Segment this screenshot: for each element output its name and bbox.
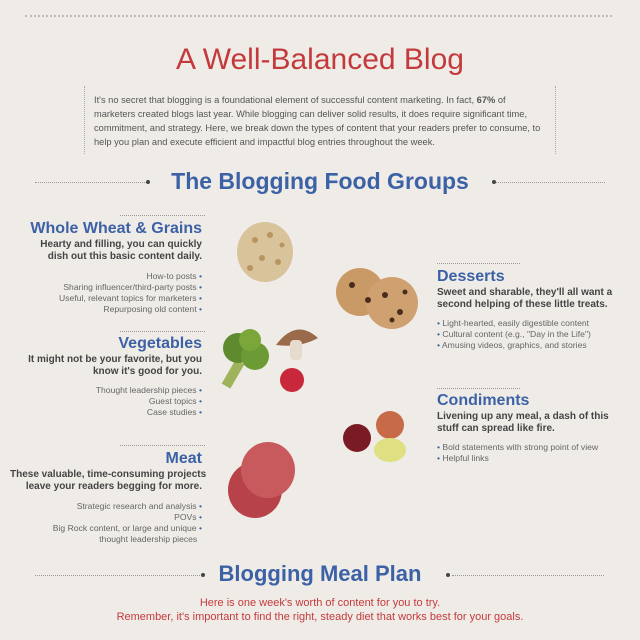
panel: vegetables: Guest topics — [149, 396, 197, 406]
panel: whole wheat: How-to posts — [146, 271, 197, 281]
icon: broccoli — [222, 329, 269, 389]
panel: whole wheat: Useful, relevant topics for marketers — [59, 293, 197, 303]
red subtitle — [117, 597, 523, 623]
panel: vegetables — [28, 331, 205, 417]
panel: condiments: Livening up any meal, a dash of this — [437, 411, 609, 422]
red subtitle: Here is one week's worth of content for you to try. — [200, 597, 440, 609]
panel: vegetables: Vegetables — [118, 335, 202, 352]
panel: whole wheat: Whole Wheat & Grains — [30, 220, 202, 237]
intro paragraph: It's no secret that blogging is a foundational element of successful content marketing. In fact, 67% of marketers created blogs last year. While blogging can deliver solid results, it does require significant time, commitment, and strategy. Here, we break down the types of content that your readers prefer to consume, to help you plan and execute efficient and impactful blog entries throughout the week. — [94, 95, 540, 147]
icon: condiments — [343, 411, 406, 462]
panel: desserts: second helping of these little treats. — [437, 299, 608, 310]
panel: desserts: Amusing videos, graphics, and stories — [442, 340, 587, 350]
panel: whole wheat: Hearty and filling, you can quickly — [40, 239, 202, 250]
panel: whole wheat — [30, 215, 205, 314]
icon: salami — [228, 442, 295, 518]
panel: meat: These valuable, time-consuming projects — [10, 469, 206, 480]
panel: meat: Strategic research and analysis — [77, 501, 197, 511]
panel: vegetables: Thought leadership pieces — [96, 385, 197, 395]
panel: meat: leave your readers begging for more. — [26, 481, 202, 492]
panel: meat: POVs — [174, 512, 197, 522]
heading: meal plan: Blogging Meal Plan — [219, 561, 421, 586]
panel: meat — [10, 445, 206, 544]
panel: desserts — [437, 263, 612, 350]
heading: food groups: The Blogging Food Groups — [171, 168, 469, 194]
panel: meat: Meat — [166, 450, 202, 467]
panel: condiments: Bold statements with strong point of view — [442, 442, 598, 452]
title: A Well-Balanced Blog — [176, 43, 464, 76]
icon: cookies — [336, 268, 418, 329]
panel: desserts: Desserts — [437, 268, 505, 285]
panel: condiments: Helpful links — [442, 453, 489, 463]
panel: vegetables: Case studies — [147, 407, 197, 417]
panel: condiments: stuff can spread like fire. — [437, 423, 555, 434]
panel: whole wheat: dish out this basic content daily. — [48, 251, 202, 262]
panel: desserts: Sweet and sharable, they'll all want a — [437, 287, 612, 298]
panel: condiments: Condiments — [437, 392, 529, 409]
panel: desserts: Light-hearted, easily digestible content — [442, 318, 589, 328]
red subtitle: Remember, it's important to find the right, steady diet that works best for your goals. — [117, 611, 523, 623]
panel: meat: Big Rock content, or large and unique — [53, 523, 197, 533]
panel: whole wheat: Sharing influencer/third-party posts — [63, 282, 197, 292]
panel: whole wheat: Repurposing old content — [103, 304, 197, 314]
panel: vegetables: know it's good for you. — [93, 366, 202, 377]
icon: mushroom — [276, 329, 318, 360]
icon: radish — [280, 368, 304, 392]
panel: vegetables: It might not be your favorite, but you — [28, 354, 202, 365]
icon: grains — [237, 222, 293, 282]
panel: desserts: Cultural content (e.g., "Day in the Life") — [442, 329, 591, 339]
panel: condiments — [437, 388, 609, 463]
panel: meat: thought leadership pieces — [99, 534, 197, 544]
